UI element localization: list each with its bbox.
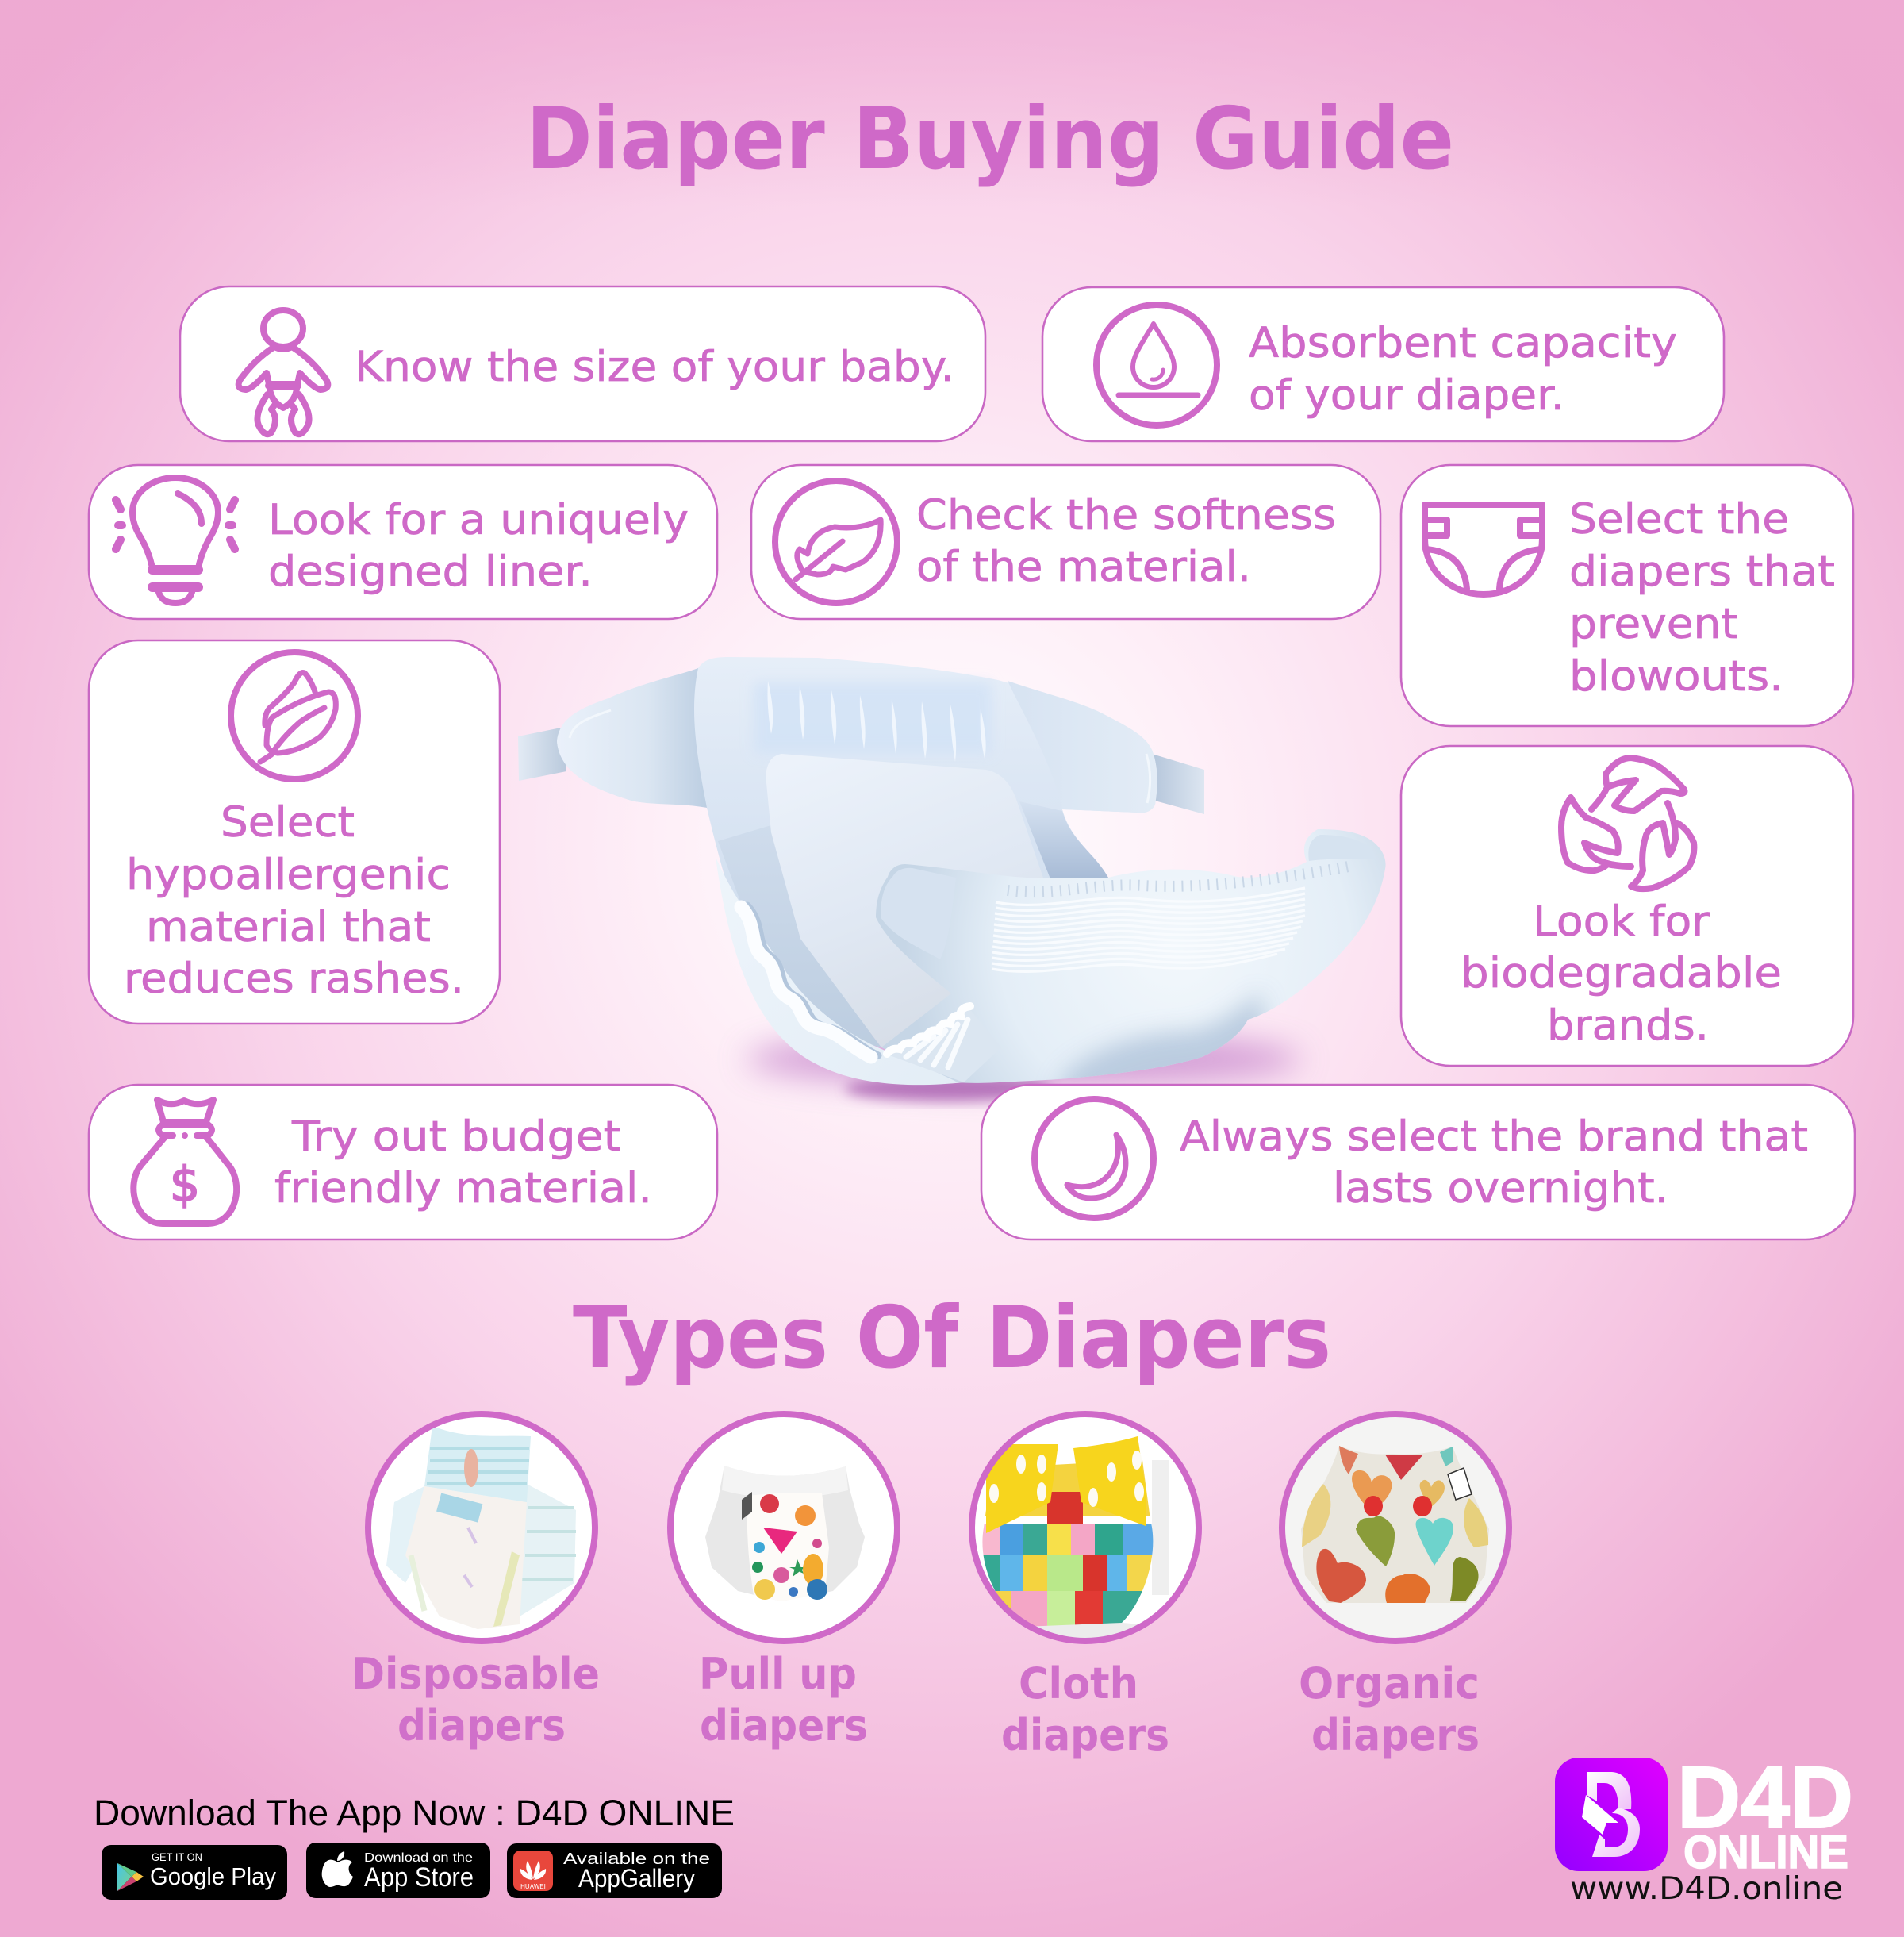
- icon: leaf in circle: [231, 652, 358, 779]
- brand logo: D4D Online: [1555, 1749, 1853, 1907]
- label: Try out budget: [291, 1113, 621, 1161]
- wordmark: D4D: [1677, 1749, 1853, 1847]
- label: Look for: [1533, 897, 1710, 946]
- card: budget friendly: [89, 1085, 717, 1239]
- outer shell bottom: [716, 857, 964, 1085]
- card: lasts overnight: [981, 1085, 1855, 1239]
- download call to action: Download The App Now : D4D ONLINE: [94, 1793, 735, 1833]
- label: Organic: [1299, 1658, 1480, 1708]
- label: prevent: [1569, 600, 1738, 648]
- label: Select the: [1569, 495, 1789, 544]
- leg ruffle: [741, 905, 878, 1057]
- right wing: [1008, 681, 1157, 813]
- front waist ribbing: [992, 888, 1305, 971]
- diaper ground shadow: [746, 1031, 1301, 1101]
- photo: colourful cloth diaper: [972, 1414, 1199, 1641]
- icon: feather in circle: [775, 481, 897, 603]
- badge text: AppGallery: [578, 1864, 695, 1893]
- label: [351, 1649, 600, 1751]
- label: [916, 491, 1336, 591]
- icon: huawei: HUAWEI: [520, 1883, 546, 1890]
- back panel: [557, 657, 1157, 1032]
- label: designed liner.: [268, 548, 593, 596]
- inner shade: [1019, 801, 1108, 881]
- card: prevent blowouts: [1401, 465, 1853, 726]
- back ear of front panel: [1308, 835, 1376, 861]
- label: Pull up: [699, 1649, 857, 1699]
- icon: baby: [239, 310, 328, 434]
- type: organic diapers: [1282, 1414, 1509, 1760]
- badge: app gallery: [507, 1843, 722, 1898]
- label: brands.: [1547, 1001, 1709, 1050]
- label: diapers: [1311, 1710, 1480, 1760]
- label: hypoallergenic: [126, 851, 451, 899]
- label: diapers that: [1569, 548, 1835, 596]
- badge text: Google Play: [150, 1862, 276, 1890]
- label: material that: [146, 903, 431, 951]
- front panel: [876, 829, 1386, 1083]
- type: disposable diapers: [351, 1414, 600, 1751]
- label: [268, 496, 689, 596]
- crotch elastic ribs: [883, 1006, 1001, 1082]
- icon: water drop in circle: [1096, 305, 1217, 425]
- ring: [670, 1414, 897, 1641]
- label: lasts overnight.: [1333, 1164, 1668, 1213]
- card: softness of the material: [751, 465, 1380, 619]
- card: know the size of your baby: [180, 286, 985, 441]
- label: Know the size of your baby.: [355, 343, 954, 391]
- label: reduces rashes.: [124, 955, 464, 1003]
- blue strip left of pad: [718, 825, 881, 1047]
- ring: [1282, 1414, 1509, 1641]
- icon: recycling leaves: [1561, 758, 1694, 889]
- photo: stack of disposable diapers: [368, 1414, 595, 1641]
- card: biodegradable brands: [1401, 746, 1853, 1066]
- icon: light bulb: [116, 478, 235, 603]
- label: [699, 1649, 868, 1751]
- heading: types of diapers: Types Of Diapers: [573, 1289, 1331, 1388]
- badge: google play: [102, 1845, 287, 1900]
- photo: pull up training pants: [670, 1414, 897, 1641]
- label: Disposable: [351, 1649, 600, 1699]
- label: [1569, 495, 1835, 701]
- front waist stitch band: [1008, 867, 1349, 892]
- icon: money bag: [133, 1100, 236, 1224]
- ring: [368, 1414, 595, 1641]
- badge text: App Store: [364, 1862, 474, 1893]
- waistband tint and slits: [754, 681, 992, 762]
- label: of the material.: [916, 543, 1251, 591]
- title: Diaper Buying Guide: [526, 90, 1454, 189]
- icon: apple: [322, 1851, 353, 1887]
- label: Always select the brand that: [1180, 1113, 1808, 1161]
- label: Check the softness: [916, 491, 1336, 540]
- icon: moon in circle: [1035, 1099, 1154, 1218]
- left wing: [557, 668, 707, 808]
- label: [124, 798, 464, 1003]
- badge text: [563, 1851, 710, 1893]
- fastening strips: [518, 728, 1204, 814]
- badge text: [364, 1851, 474, 1893]
- ring: [972, 1414, 1199, 1641]
- icon: dollar sign: $: [170, 1157, 200, 1213]
- wordmark: ONLINE: [1683, 1827, 1848, 1878]
- absorbent pad: [766, 754, 1055, 1047]
- logo tile: [1555, 1758, 1668, 1871]
- icon: diaper: [1425, 505, 1542, 594]
- badge text: Download on the: [364, 1851, 473, 1865]
- icon: huawei: [513, 1851, 553, 1891]
- label: [1180, 1113, 1808, 1213]
- label: biodegradable: [1461, 949, 1782, 997]
- label: [1299, 1658, 1480, 1760]
- label: diapers: [700, 1701, 868, 1751]
- label: [1249, 319, 1677, 420]
- underside shading: [1054, 990, 1273, 1079]
- label: friendly material.: [274, 1164, 652, 1213]
- label: Absorbent capacity: [1249, 319, 1677, 367]
- badge text: Available on the: [563, 1851, 710, 1868]
- badge: app store: [306, 1843, 490, 1898]
- label: [1001, 1658, 1169, 1760]
- illustration: main diaper: [518, 657, 1386, 1111]
- label: [1461, 897, 1782, 1050]
- label: Look for a uniquely: [268, 496, 689, 544]
- card: hypoallergenic material: [89, 640, 500, 1024]
- label: [274, 1113, 652, 1213]
- label: Select: [221, 798, 355, 847]
- website: www.D4D.online: [1570, 1871, 1843, 1907]
- label: diapers: [1001, 1710, 1169, 1760]
- badge text: GET IT ON: [152, 1851, 202, 1863]
- card: absorbent capacity: [1042, 287, 1724, 441]
- label: of your diaper.: [1249, 371, 1564, 420]
- icon: play triangle: [117, 1863, 144, 1891]
- card: uniquely designed liner: [89, 465, 717, 619]
- label: Cloth: [1019, 1658, 1138, 1708]
- label: diapers: [397, 1701, 566, 1751]
- photo: organic diaper with hearts: [1282, 1414, 1509, 1641]
- type: pull up diapers: [670, 1414, 897, 1751]
- type: cloth diapers: [972, 1414, 1199, 1760]
- label: blowouts.: [1569, 652, 1783, 701]
- badge text: [150, 1851, 276, 1890]
- front inner fold: [881, 868, 956, 959]
